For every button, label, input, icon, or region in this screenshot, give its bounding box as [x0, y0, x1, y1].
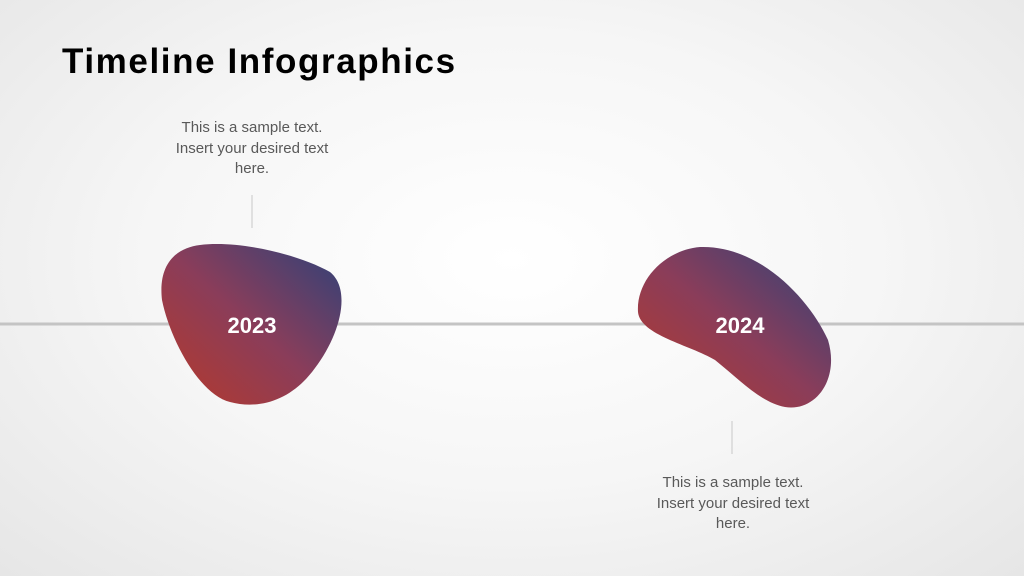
text block: 2023: This is a sample text. — [182, 119, 322, 136]
blob: 2024: 2024 — [716, 313, 765, 338]
text block: 2024: This is a sample text. — [663, 474, 803, 491]
text block: 2023 — [176, 119, 328, 177]
text block: 2024 — [657, 474, 810, 532]
title: Timeline Infographics — [62, 42, 457, 81]
blob: 2023: 2023 — [228, 313, 276, 338]
text block: 2024: here. — [716, 515, 750, 532]
text block: 2023: Insert your desired text — [176, 140, 328, 156]
blob: 2024 — [638, 247, 831, 408]
blob: 2023 — [161, 244, 342, 405]
text block: 2024: Insert your desired text — [657, 494, 809, 512]
text block: 2023: here. — [235, 160, 269, 177]
